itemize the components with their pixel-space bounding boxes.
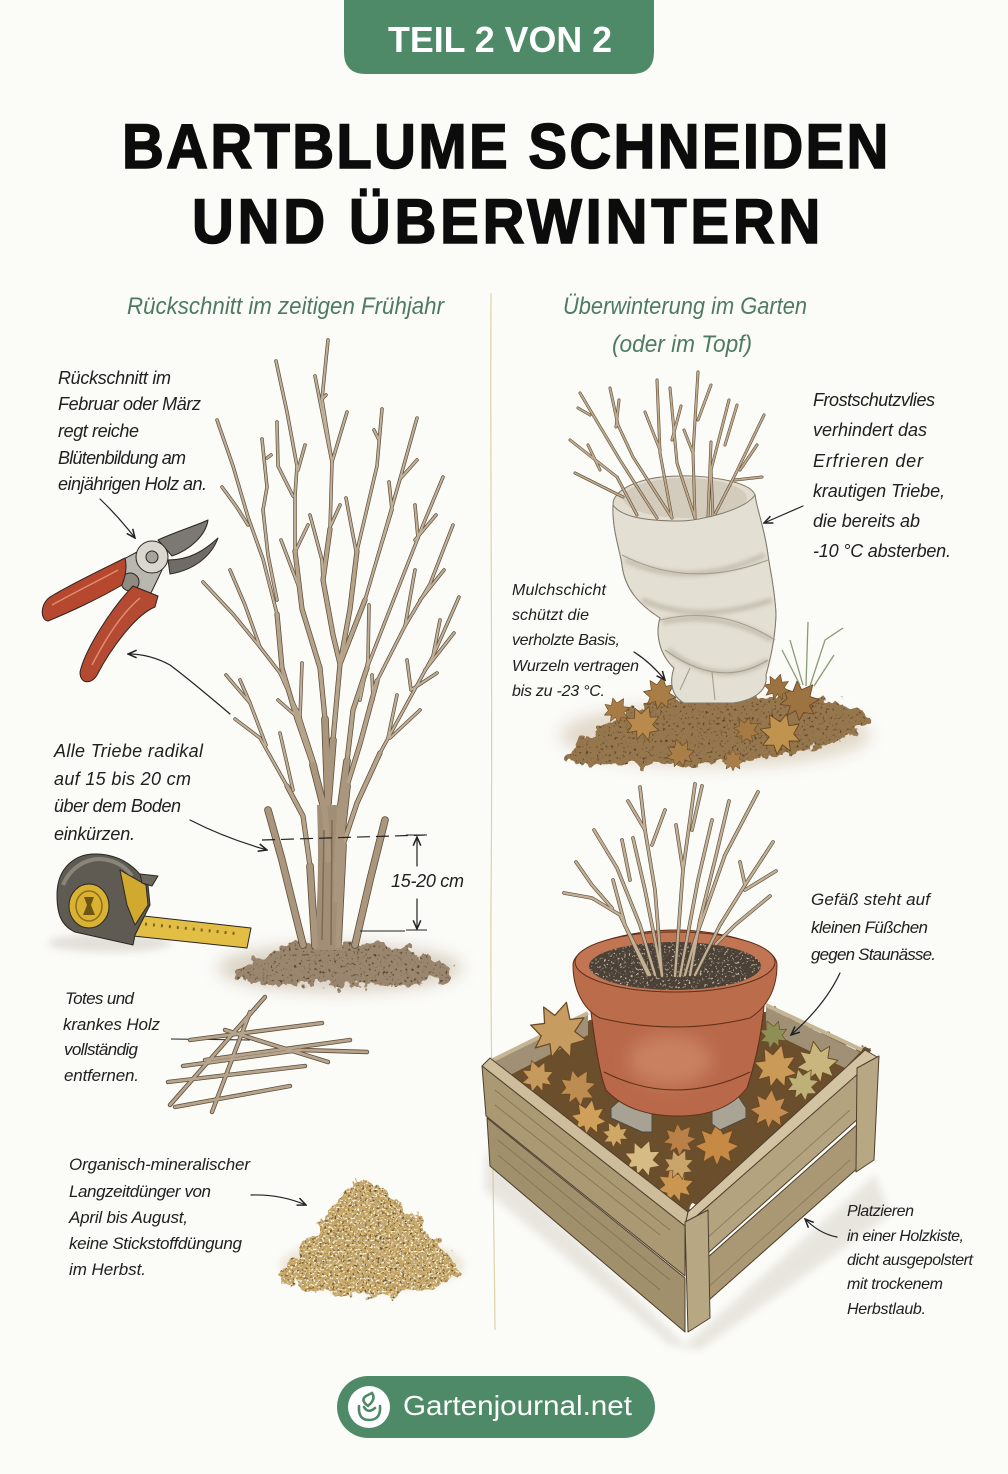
illustration: soil mound under shrub: [218, 942, 462, 992]
text: mulch layer: verholzte Basis,: [512, 632, 620, 649]
text: timing of pruning: [58, 368, 207, 494]
text: remove dead wood: [63, 989, 160, 1085]
text: frost fleece: [813, 390, 951, 561]
terracotta pot: [573, 930, 777, 1116]
text: pot feet: kleinen Füßchen: [811, 918, 928, 937]
text: pot feet: Gefäß steht auf: [811, 890, 932, 909]
arrow to fleece: [764, 506, 803, 523]
arrow to cut line: [190, 820, 267, 850]
arrow to fertiliser: [251, 1195, 306, 1205]
text: pot feet: gegen Staunässe.: [811, 945, 936, 964]
text: frost fleece: krautigen Triebe,: [813, 481, 945, 501]
text: fertiliser: Organisch-mineralischer: [69, 1155, 251, 1174]
arrow to mulch: [634, 652, 665, 680]
footer badge: Gartenjournal.net: Gartenjournal.net: [403, 1390, 632, 1421]
top banner: Teil 2 von 2: [344, 0, 654, 74]
arrow to crate: [805, 1219, 837, 1237]
grass tuft: [782, 622, 843, 686]
text: fertiliser: [68, 1155, 251, 1279]
potted shrub branches: [564, 784, 776, 976]
text: mulch layer: Wurzeln vertragen: [512, 658, 639, 675]
text: wooden box: Herbstlaub.: [847, 1301, 926, 1318]
text: frost fleece: -10 °C absterben.: [813, 541, 951, 561]
illustration: pile of cut branches: [168, 997, 367, 1112]
text: frost fleece: die bereits ab: [813, 511, 920, 531]
crate right wall: [685, 1050, 879, 1308]
text: cut back shoots: einkürzen.: [54, 824, 135, 844]
text: wooden box: mit trockenem: [847, 1276, 943, 1293]
text: fertiliser: Langzeitdünger von: [69, 1182, 211, 1201]
fleece wrap front: [613, 495, 776, 703]
feet stones: [611, 1096, 746, 1132]
text: wooden box: in einer Holzkiste,: [847, 1228, 964, 1245]
crate left wall: [482, 1058, 688, 1332]
arrow from shrub to shears: [128, 654, 230, 714]
text: cut back shoots: [53, 741, 204, 844]
illustration: fleece wrapped shrub: [560, 372, 872, 771]
arrow to pruning shears: [100, 499, 135, 538]
crate corner posts: [685, 1056, 879, 1332]
crate shadow: [485, 1150, 890, 1350]
text: frost fleece: Erfrieren der: [813, 451, 924, 471]
text: timing of pruning: Blütenbildung am: [58, 448, 186, 468]
text: fertiliser: keine Stickstoffdüngung: [69, 1234, 243, 1253]
text: mulch layer: Mulchschicht: [512, 582, 607, 599]
height mark: 15-20 cm: 15-20 cm: [391, 871, 464, 891]
shoots above fleece: [570, 372, 764, 518]
illustration: fertiliser granule pile: [280, 1180, 465, 1295]
icon: pruning shears: [42, 520, 218, 682]
heading: right column: Überwinterung im Garten: [563, 293, 807, 320]
text: fertiliser: April bis August,: [68, 1208, 188, 1227]
text: timing of pruning: Februar oder März: [58, 394, 201, 414]
illustration: wooden crate with potted shrub: [482, 784, 890, 1350]
height mark: 15-20 cm: [262, 835, 464, 931]
text: pot feet: [811, 890, 936, 964]
icon: logo: [348, 1386, 390, 1428]
heading: right column: [563, 293, 807, 358]
text: frost fleece: Frostschutzvlies: [813, 390, 935, 410]
footer badge: Gartenjournal.net: [337, 1376, 655, 1438]
title: BARTBLUME SCHNEIDEN: [122, 111, 888, 182]
title: [122, 111, 888, 257]
text: timing of pruning: Rückschnitt im: [58, 368, 171, 388]
text: cut back shoots: Alle Triebe radikal: [53, 741, 204, 761]
text: timing of pruning: einjährigen Holz an.: [58, 474, 207, 494]
arrow to pot feet: [791, 973, 840, 1035]
text: fertiliser: im Herbst.: [69, 1260, 146, 1279]
heading: left column: Rückschnitt im zeitigen Frühjahr: [127, 293, 445, 320]
text: cut back shoots: über dem Boden: [54, 796, 181, 816]
text: timing of pruning: regt reiche: [58, 421, 139, 441]
text: cut back shoots: auf 15 bis 20 cm: [54, 769, 191, 789]
text: frost fleece: verhindert das: [813, 420, 927, 440]
text: mulch layer: schützt die: [512, 607, 589, 624]
text: mulch layer: bis zu -23 °C.: [512, 683, 605, 700]
text: remove dead wood: vollständig: [64, 1040, 139, 1059]
text: remove dead wood: Totes und: [65, 989, 135, 1008]
fleece back and opening: [613, 476, 776, 703]
icon: tape measure: [48, 854, 251, 952]
title: UND ÜBERWINTERN: [192, 186, 820, 257]
text: remove dead wood: entfernen.: [64, 1066, 139, 1085]
text: mulch layer: [512, 582, 639, 700]
text: wooden box: [847, 1203, 974, 1318]
illustration: bare pruned shrub: [203, 340, 459, 950]
top banner: Teil 2 von 2: TEIL 2 VON 2: [388, 19, 612, 60]
crate interior with leaves: [490, 975, 873, 1218]
text: wooden box: Platzieren: [847, 1203, 914, 1220]
mulch layer: [565, 671, 872, 771]
text: wooden box: dicht ausgepolstert: [847, 1252, 974, 1269]
text: remove dead wood: krankes Holz: [63, 1015, 160, 1034]
heading: right column: (oder im Topf): [612, 331, 752, 358]
